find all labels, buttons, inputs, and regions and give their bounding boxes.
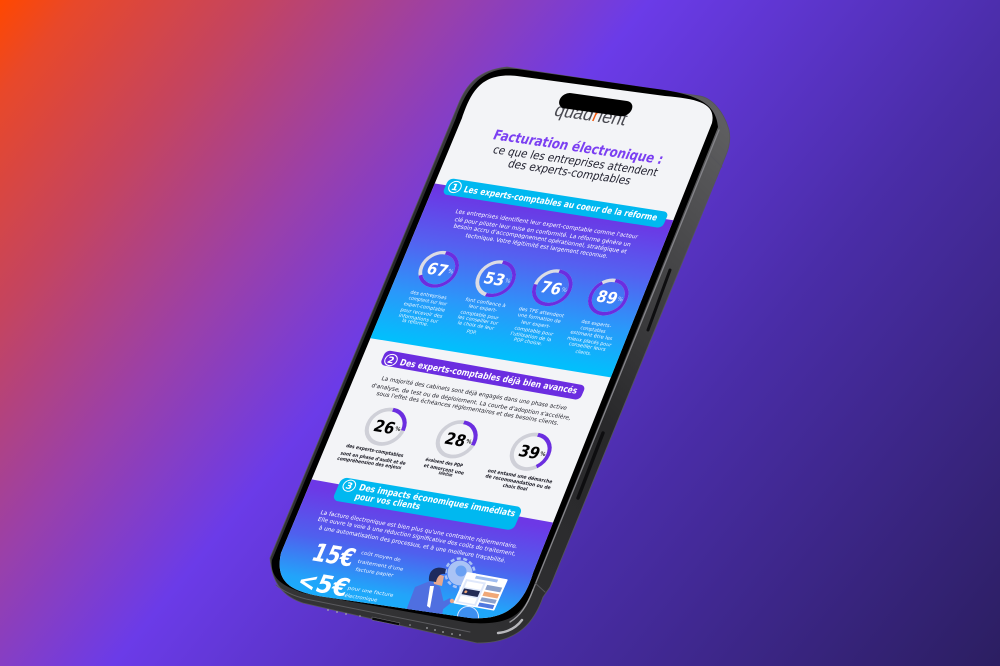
stat: 76%: % bbox=[560, 287, 568, 294]
stat: 39% bbox=[510, 432, 552, 471]
caption: 67%: informations sur bbox=[397, 313, 440, 325]
clock bbox=[457, 606, 479, 618]
caption: 39%: de recommandation ou de bbox=[484, 474, 552, 491]
text block: section 3 intro: La facture électronique est bien plus qu'une contrainte réglementaire. bbox=[319, 509, 519, 550]
stat: 67%: % bbox=[447, 269, 455, 276]
stat: 67% bbox=[418, 250, 459, 288]
heading: section 1 bbox=[442, 178, 669, 228]
panel: section 3 background bbox=[280, 479, 553, 618]
panel: section 1 background bbox=[370, 184, 674, 378]
title: Facturation électronique : bbox=[490, 128, 666, 168]
stat: 26% bbox=[364, 408, 407, 446]
caption: 76%: comptable pour bbox=[513, 326, 555, 338]
stat: 76%: 76 bbox=[537, 278, 565, 299]
side button upper bbox=[648, 270, 670, 330]
stat: 28% bbox=[436, 420, 478, 458]
logo: quadrient bbox=[551, 100, 631, 130]
caption: 89%: estiment être les bbox=[569, 329, 614, 342]
stat: 26%: % bbox=[394, 427, 402, 433]
text block: section 1 intro: besoin accru d'accompagnement opérationnel, stratégique et bbox=[452, 223, 629, 255]
title: des experts-comptables bbox=[506, 157, 633, 187]
caption: 67%: comptent sur leur bbox=[407, 296, 449, 308]
side button lower bbox=[578, 433, 603, 498]
caption: 67%: expert-comptable bbox=[402, 301, 446, 314]
stat: 89%: % bbox=[616, 297, 624, 303]
dynamic island bbox=[556, 92, 635, 117]
caption: 28%: sélection bbox=[438, 469, 454, 479]
caption: 28%: et amorcent une bbox=[423, 463, 465, 477]
stat: 39%: 39 bbox=[516, 442, 543, 463]
caption: 89%: clients. bbox=[574, 349, 593, 357]
speaker and port bbox=[327, 609, 461, 636]
caption: 53%: font confiance à bbox=[464, 296, 507, 309]
phone frame bbox=[270, 67, 730, 643]
number badge 2: 2 bbox=[385, 355, 396, 366]
caption: 89%: mieux placés pour bbox=[566, 335, 614, 349]
number badge 2 bbox=[384, 354, 398, 366]
heading: section 3: pour vos clients bbox=[353, 492, 423, 512]
dashboard panel bbox=[453, 572, 508, 611]
caption: 26%: des experts-comptables bbox=[345, 443, 404, 459]
caption: under 5 euros: électronique bbox=[343, 592, 379, 603]
stat: 76% bbox=[532, 269, 573, 306]
caption: 76%: des TPE attendent bbox=[517, 306, 565, 319]
phone bbox=[270, 67, 730, 643]
caption: under 5 euros: pour une facture bbox=[346, 586, 394, 599]
caption: 15 euros: facture papier bbox=[354, 567, 395, 579]
illustration: man with dashboard bbox=[406, 557, 508, 618]
caption: 76% bbox=[509, 306, 565, 347]
stat: 39%: % bbox=[539, 452, 547, 458]
caption: 28% bbox=[424, 457, 464, 477]
caption: 15 euros bbox=[356, 552, 404, 576]
stat: under 5 euros: <5€ bbox=[292, 567, 354, 603]
stat: 53%: % bbox=[504, 278, 512, 285]
number badge 3: 3 bbox=[344, 481, 354, 492]
caption: 39%: choix final bbox=[501, 483, 529, 493]
text block: section 1 intro: Les entreprises identifient leur expert-comptable comme l'acteur bbox=[454, 209, 639, 241]
heading: section 2 bbox=[380, 350, 586, 400]
screen background bbox=[270, 70, 720, 625]
caption: 89%: conseiller leurs bbox=[567, 341, 607, 353]
caption: 76%: leur expert- bbox=[520, 320, 551, 330]
caption: 67% bbox=[397, 290, 449, 328]
caption: 89% bbox=[567, 320, 612, 356]
caption: 15 euros: traitement d'une bbox=[357, 559, 404, 573]
man bbox=[404, 568, 454, 616]
text block: section 2 intro: sous l'effet des échéances réglementaires et des besoins clients. bbox=[375, 390, 560, 427]
caption: 67%: pour recevoir des bbox=[399, 307, 444, 320]
frame highlights bbox=[276, 130, 722, 633]
caption: 39% bbox=[486, 470, 552, 491]
stat: 89%: 89 bbox=[593, 287, 621, 308]
caption: 67%: des entreprises bbox=[409, 290, 448, 301]
caption: 26% bbox=[337, 444, 406, 470]
screen bbox=[270, 70, 730, 628]
heading: section 3: Des impacts économiques immédiats bbox=[357, 483, 518, 519]
text block: section 1 intro: clé pour piloter leur mise en conformité. La réforme génère un bbox=[453, 216, 632, 248]
stat: 67%: 67 bbox=[424, 259, 451, 280]
caption: 26%: sont en phase d'audit et de bbox=[339, 451, 407, 467]
caption: 39%: ont entamé une démarche bbox=[487, 467, 554, 485]
caption: 26%: compréhension des enjeux bbox=[336, 455, 403, 471]
caption: 76%: une formation de bbox=[516, 312, 562, 325]
caption: 67%: la réforme. bbox=[401, 317, 430, 328]
stat: 53% bbox=[475, 260, 516, 298]
text block: section 1 intro: technique. Votre légitimité est largement reconnue. bbox=[464, 232, 609, 260]
text block: section 2 intro: La majorité des cabinets sont déjà engagés dans une phase active bbox=[380, 375, 568, 412]
caption: 76%: PDP choisie. bbox=[512, 337, 544, 347]
caption: 28%: évaluent des PDP bbox=[424, 456, 464, 469]
stat: 26%: 26 bbox=[371, 417, 398, 438]
title bbox=[493, 130, 663, 184]
heading: section 2: Des experts-comptables déjà bien avancés bbox=[398, 358, 580, 397]
heading: section 3 bbox=[332, 477, 523, 531]
heading: section 1: Les experts-comptables au coeur de la réforme bbox=[462, 185, 659, 223]
stat: 89% bbox=[588, 278, 629, 316]
caption: 89%: des experts- bbox=[580, 319, 612, 329]
stat: 28%: 28 bbox=[442, 429, 469, 450]
caption: 53%: les conseiller sur bbox=[456, 315, 500, 327]
caption: 53%: leur expert- bbox=[467, 304, 498, 314]
stat: 28%: % bbox=[465, 439, 473, 446]
caption: 76%: l'utilisation de la bbox=[509, 331, 552, 343]
text block: section 3 intro: à une automatisation des processus, et à une meilleure traçabilité. bbox=[318, 525, 507, 564]
number badge 1 bbox=[448, 180, 462, 194]
caption: 53% bbox=[458, 297, 506, 334]
caption: 15 euros: coût moyen de bbox=[360, 549, 402, 563]
number badge 3 bbox=[342, 480, 356, 492]
gear bbox=[446, 558, 474, 588]
stat: 53%: 53 bbox=[481, 269, 508, 290]
title: ce que les entreprises attendent bbox=[491, 143, 661, 179]
stat: 15 euros: 15€ bbox=[307, 539, 360, 573]
caption: 53%: le choix de leur bbox=[456, 320, 496, 332]
text block: section 1 intro bbox=[452, 209, 639, 260]
caption: 53%: PDP. bbox=[465, 329, 478, 336]
caption: 53%: comptable pour bbox=[459, 310, 500, 322]
number badge 1: 1 bbox=[449, 182, 460, 193]
text block: section 3 intro: Elle ouvre la voie à une réduction significative des coûts de traitement, bbox=[317, 516, 517, 558]
black bezel bbox=[272, 69, 718, 623]
caption: 89%: comptables bbox=[579, 325, 607, 335]
caption: under 5 euros bbox=[344, 586, 394, 602]
text block: section 2 intro: d'analyse, de test ou de déploiement. La courbe d'adoption s'accélère, bbox=[370, 382, 572, 422]
